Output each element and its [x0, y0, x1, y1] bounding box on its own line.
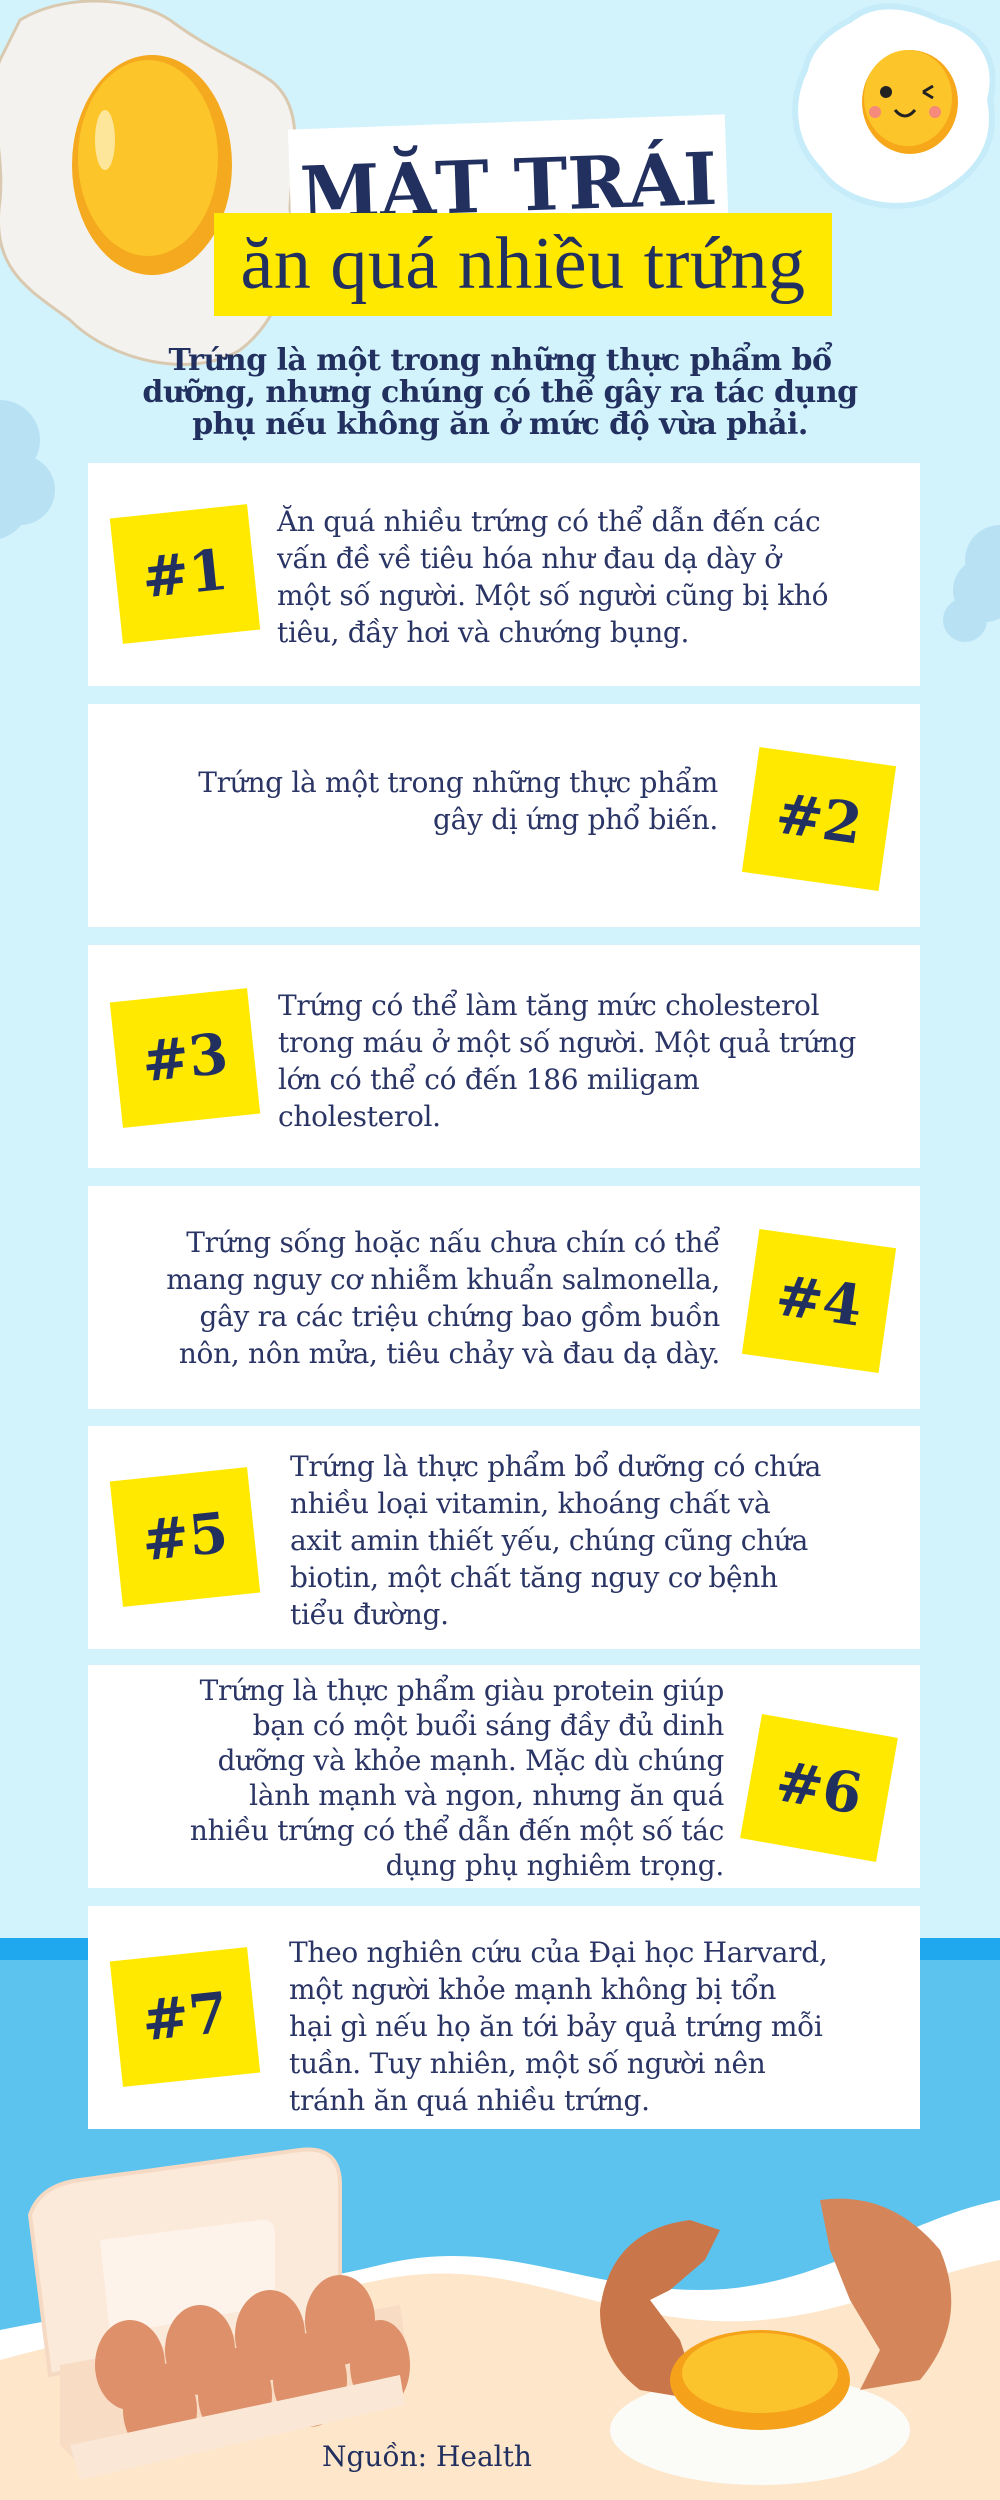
badge #5 [110, 1467, 260, 1607]
text 1 [276, 505, 828, 649]
text 6: dưỡng và khỏe mạnh. Mặc dù chúng [218, 1744, 724, 1777]
text 6: bạn có một buổi sáng đầy đủ dinh [253, 1709, 724, 1742]
badge #2 [742, 747, 896, 891]
text 4: gây ra các triệu chứng bao gồm buồn [200, 1300, 720, 1333]
text 6: nhiều trứng có thể dẫn đến một số tác [190, 1814, 724, 1847]
subtitle box: ăn quá nhiều trứng [241, 223, 805, 305]
badge #4: #4 [772, 1262, 866, 1340]
text 7: tuần. Tuy nhiên, một số người nên [289, 2047, 766, 2080]
cloud right [943, 525, 1000, 642]
text 7: tránh ăn quá nhiều trứng. [289, 2084, 650, 2117]
card 2 [88, 704, 920, 927]
text 3: trong máu ở một số người. Một quả trứng [278, 1026, 856, 1059]
card 6 [88, 1665, 920, 1888]
badge #2: #2 [772, 780, 866, 858]
badge #4 [742, 1229, 896, 1373]
intro text: phụ nếu không ăn ở mức độ vừa phải. [192, 407, 808, 442]
badge #7 [110, 1947, 260, 2087]
badge #1: #1 [139, 537, 231, 611]
card 5 [88, 1426, 920, 1649]
card 1 [88, 463, 920, 686]
icon: smiling egg right [792, 4, 996, 209]
text 5: nhiều loại vitamin, khoáng chất và [290, 1487, 770, 1520]
text 2 [198, 766, 718, 836]
text 4: nôn, nôn mửa, tiêu chảy và đau dạ dày. [179, 1337, 720, 1370]
text 7: Theo nghiên cứu của Đại học Harvard, [289, 1936, 827, 1969]
text 4 [166, 1226, 720, 1370]
intro text: dưỡng, nhưng chúng có thể gây ra tác dụng [142, 375, 858, 410]
text 1: Ăn quá nhiều trứng có thể dẫn đến các [277, 505, 820, 538]
text 7: hại gì nếu họ ăn tới bảy quả trứng mỗi [289, 2010, 823, 2043]
source: Nguồn: Health [322, 2440, 532, 2473]
text 3: lớn có thể có đến 186 miligam [278, 1063, 699, 1096]
text 4: Trứng sống hoặc nấu chưa chín có thể [186, 1226, 720, 1259]
badge #7: #7 [139, 1980, 231, 2054]
intro text [142, 342, 858, 442]
card 4 [88, 1186, 920, 1409]
text 6: lành mạnh và ngon, nhưng ăn quá [249, 1779, 724, 1812]
text 7: một người khỏe mạnh không bị tổn [289, 1973, 776, 2006]
sea band [0, 1938, 1000, 1960]
badge #5: #5 [139, 1500, 231, 1574]
card 7 [88, 1906, 920, 2129]
icon: egg carton [28, 2148, 410, 2480]
text 1: một số người. Một số người cũng bị khó [277, 579, 828, 612]
title box: MẶT TRÁI [299, 135, 718, 235]
text 2: gây dị ứng phổ biến. [433, 803, 718, 836]
text 3: Trứng có thể làm tăng mức cholesterol [278, 989, 819, 1022]
text 7 [289, 1936, 827, 2117]
text 5 [290, 1450, 821, 1631]
text 6: Trứng là thực phẩm giàu protein giúp [200, 1674, 724, 1707]
icon: fried egg left [0, 0, 296, 366]
text 3 [278, 989, 856, 1133]
icon: cracked egg [600, 2198, 952, 2485]
text 2: Trứng là một trong những thực phẩm [198, 766, 718, 799]
text 5: tiểu đường. [290, 1598, 449, 1631]
text 6 [190, 1674, 724, 1882]
intro text: Trứng là một trong những thực phẩm bổ [168, 343, 832, 378]
text 3: cholesterol. [278, 1100, 441, 1133]
badge #1 [110, 504, 260, 644]
badge #3 [110, 988, 260, 1128]
text 4: mang nguy cơ nhiễm khuẩn salmonella, [166, 1263, 720, 1296]
badge #6 [740, 1714, 898, 1862]
text 6: dụng phụ nghiêm trọng. [386, 1849, 724, 1882]
text 1: vấn đề về tiêu hóa như đau dạ dày ở [277, 542, 781, 575]
title box [288, 114, 729, 256]
badge #3: #3 [139, 1021, 231, 1095]
card 3 [88, 945, 920, 1168]
text 5: Trứng là thực phẩm bổ dưỡng có chứa [290, 1450, 821, 1483]
text 5: axit amin thiết yếu, chúng cũng chứa [290, 1524, 808, 1557]
text 1: tiêu, đầy hơi và chướng bụng. [277, 616, 689, 649]
text 5: biotin, một chất tăng nguy cơ bệnh [290, 1561, 778, 1594]
cloud left [0, 400, 55, 540]
badge #6: #6 [771, 1748, 867, 1828]
